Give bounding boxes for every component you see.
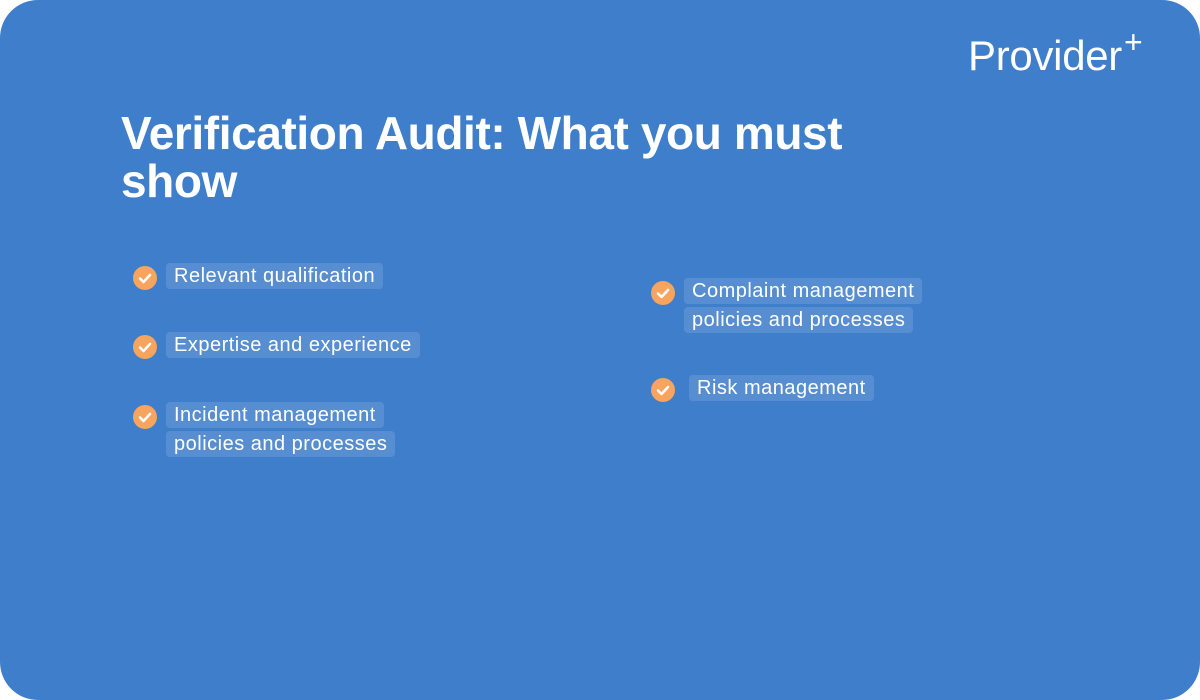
item: incident management: Incident management — [174, 404, 376, 426]
item: relevant qualification: Relevant qualification — [174, 265, 375, 287]
item: risk management: Risk management — [697, 377, 866, 399]
item: complaint management — [651, 278, 922, 333]
item: complaint management: policies and processes — [692, 309, 905, 331]
logo: Provider+ — [968, 24, 1142, 79]
title: Verification Audit: What you must show — [121, 107, 842, 207]
item: risk management — [651, 375, 874, 402]
item: expertise — [133, 332, 420, 359]
item: relevant qualification — [133, 263, 383, 290]
item: incident management — [133, 402, 395, 457]
item: expertise: Expertise and experience — [174, 334, 412, 356]
item: incident management: policies and processes — [174, 433, 387, 455]
item: complaint management: Complaint management — [692, 280, 914, 302]
